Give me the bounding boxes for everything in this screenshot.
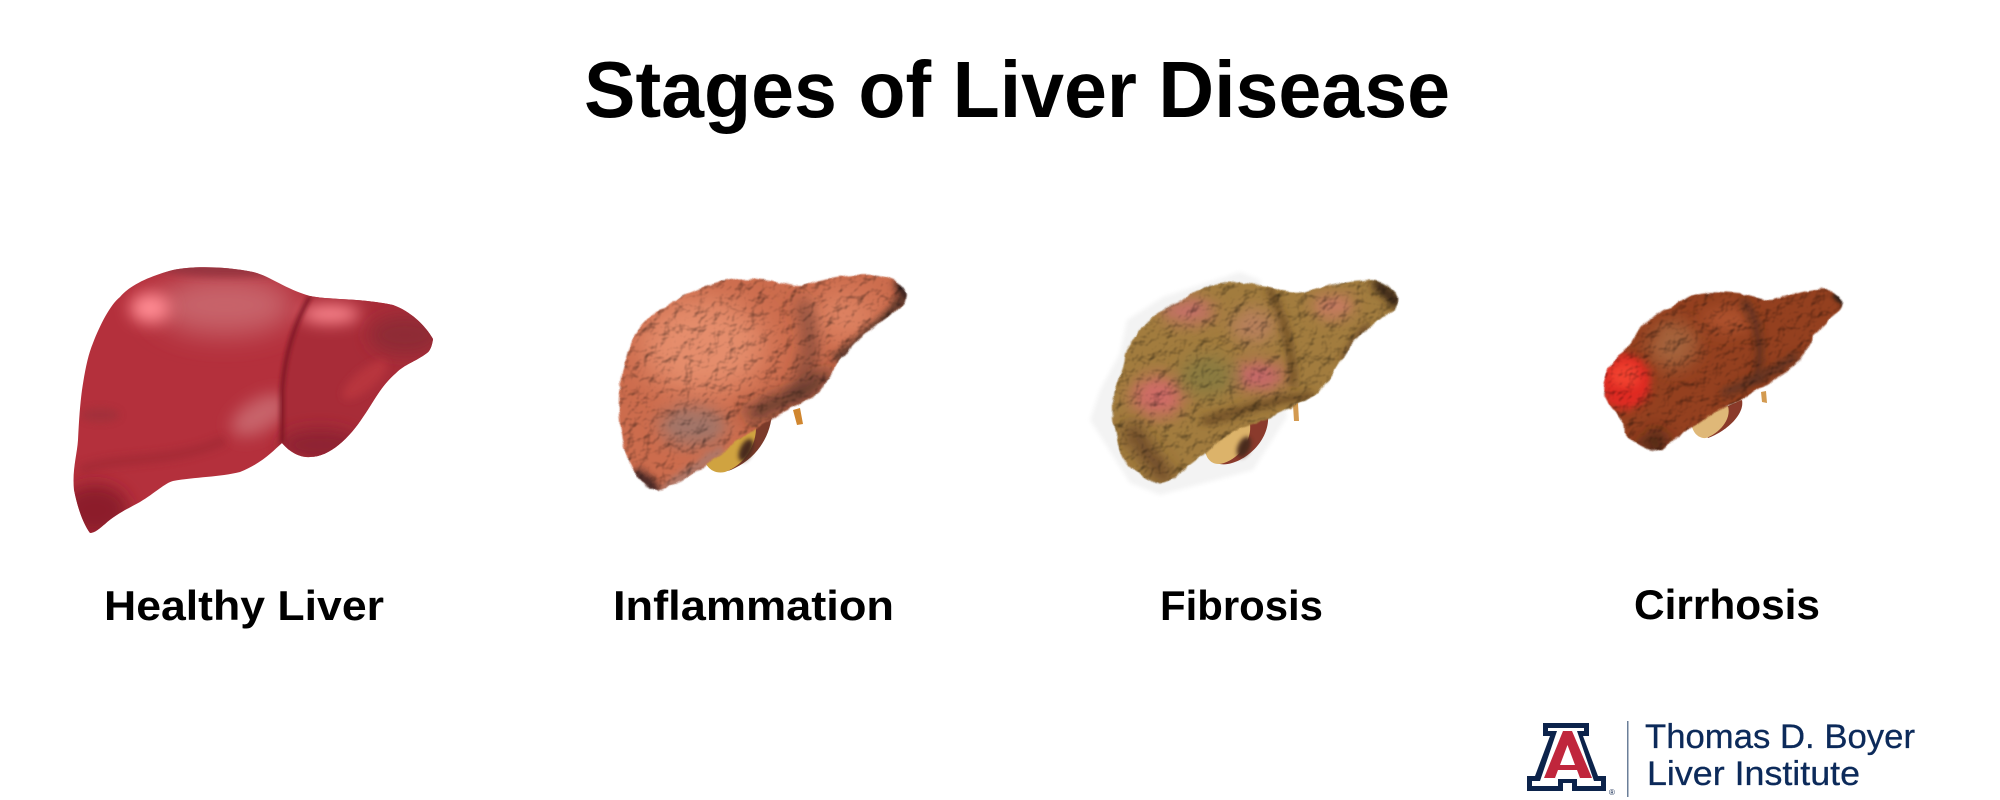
logo text line 2: Liver Institute [1647,755,1860,793]
gallbladder [1205,403,1299,464]
icon: block A mark [1527,723,1606,791]
title: Stages of Liver Disease [584,45,1450,134]
gallbladder [703,408,803,473]
logo text line 1: Thomas D. Boyer [1645,718,1915,756]
label: Inflammation: Inflammation [613,582,894,629]
registered mark: ® [1609,788,1615,797]
icon: fibrotic liver [1092,274,1400,494]
pale membrane halo [1090,272,1287,495]
logo: Thomas D. Boyer Liver Institute [1527,718,1915,797]
icon: healthy liver [74,267,433,533]
gallbladder [1692,391,1767,438]
icon: inflamed liver [618,273,908,492]
fold between the two lobes [282,296,310,443]
label: Healthy Liver: Healthy Liver [104,582,384,629]
icon: cirrhotic liver [1602,286,1844,452]
label: Cirrhosis: Cirrhosis [1634,581,1820,628]
label: Fibrosis: Fibrosis [1160,582,1323,629]
